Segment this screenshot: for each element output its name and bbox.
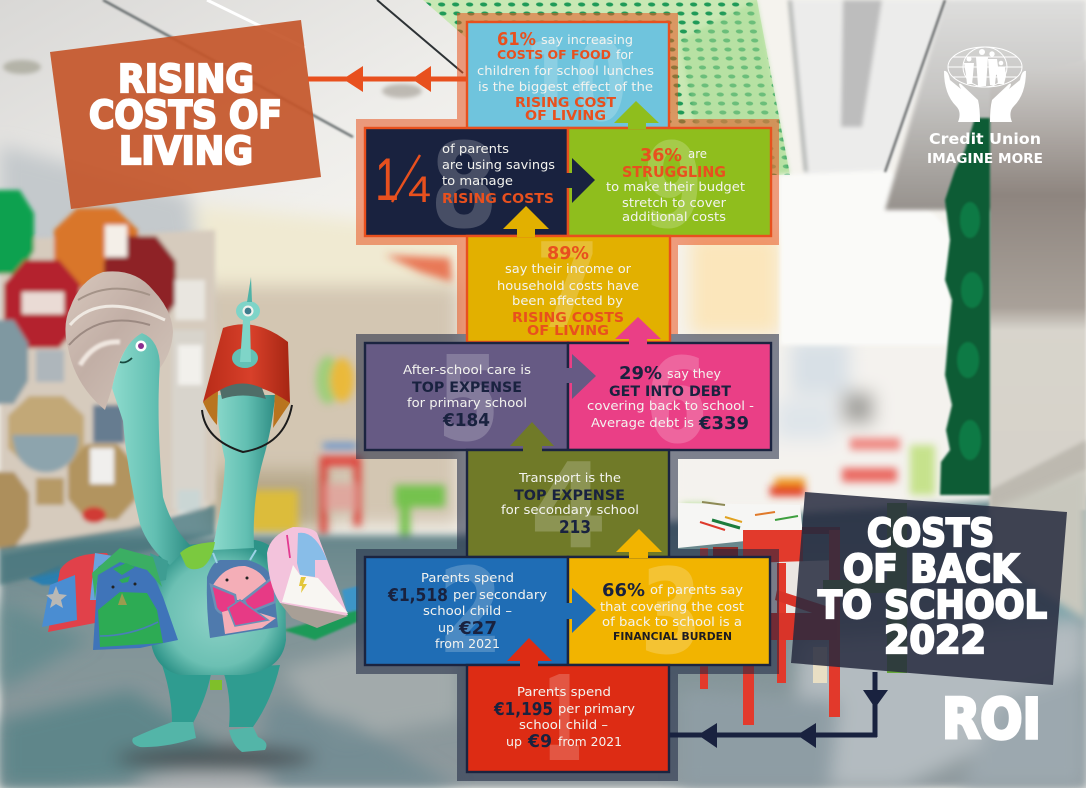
panel: step 5 after-school care: After-school care is xyxy=(403,363,531,378)
panel: step 8 savings: to manage xyxy=(442,174,513,189)
logo: Credit Union: Credit Union xyxy=(929,130,1041,148)
panel: step 8 savings: are using savings xyxy=(442,158,555,173)
logo globe xyxy=(948,47,1022,87)
panel: step 5 after-school care xyxy=(365,330,568,468)
panel: step 6 debt: GET INTO DEBT xyxy=(609,384,731,400)
panel: step 3 financial burden: 66% xyxy=(602,580,645,601)
panel: step 2 secondary spend: 2 xyxy=(438,542,503,680)
panel: step 7 income: household costs have xyxy=(497,279,639,294)
panel: step 3 financial burden: FINANCIAL BURDEN xyxy=(613,631,732,643)
panel: step 7 income: 89% xyxy=(547,243,589,264)
panel: step 9 struggling: additional costs xyxy=(622,210,726,225)
panel: step 2 secondary spend xyxy=(365,542,568,680)
panel: costs of back to school title: OF BACK xyxy=(843,547,1020,591)
panel: step 4 transport: Transport is the xyxy=(518,471,621,486)
creature feet xyxy=(132,722,266,752)
panel: step 7 income: 7 xyxy=(535,217,600,355)
arrow: step 6 to 7 xyxy=(615,317,661,345)
arrow: orange connector to rising costs title xyxy=(308,66,467,92)
logo hands xyxy=(944,71,1026,122)
panel: costs of back to school title xyxy=(791,492,1067,685)
panel: step 8 savings: of parents xyxy=(442,142,509,157)
panel: step 6 debt: covering back to school - xyxy=(587,399,754,414)
logo: Credit Union: IMAGINE MORE xyxy=(927,151,1043,167)
panel: costs of back to school title: COSTS xyxy=(867,511,994,555)
panel: step 1 primary spend: €9 xyxy=(527,731,552,752)
creature body xyxy=(150,540,286,675)
panel: step 2 secondary spend: €1,518 xyxy=(387,585,448,606)
panel: step 10 food costs: is the biggest effect of the xyxy=(478,80,653,95)
ceiling: recessed lights xyxy=(3,60,422,98)
shell turban xyxy=(65,271,173,410)
panel: step 10 food costs: for xyxy=(616,48,634,63)
floor xyxy=(0,495,1086,788)
creature legs xyxy=(162,665,280,727)
orange translucent hopscotch frame xyxy=(356,13,779,334)
panel: step 7 income: been affected by xyxy=(512,294,623,309)
panel: step 7 income: RISING COSTS xyxy=(512,310,624,326)
panel: step 6 debt xyxy=(568,332,771,470)
right neck xyxy=(212,395,275,550)
arrow: step 8 to 9 xyxy=(560,158,595,203)
panel: step 1 primary spend: Parents spend xyxy=(517,685,611,700)
green perforated ceiling panel xyxy=(423,0,790,175)
bucket hat xyxy=(202,277,292,452)
panel: step 1 primary spend: per primary xyxy=(558,702,635,717)
panel: step 4 transport: for secondary school xyxy=(501,503,639,518)
panel: step 1 primary spend xyxy=(467,650,669,788)
backpack: red with star xyxy=(42,553,113,632)
panel: step 7 income xyxy=(467,217,670,355)
panel: costs of back to school title: TO SCHOOL xyxy=(818,583,1047,627)
panel: step 2 secondary spend: from 2021 xyxy=(435,637,500,652)
panel: step 10 food costs: RISING COST xyxy=(515,95,617,111)
panel: step 6 debt: Average debt is xyxy=(591,416,694,431)
panel: step 8 savings: 4 xyxy=(408,169,431,210)
panel: rising costs of living title: COSTS OF xyxy=(89,93,282,137)
panel: step 7 income: say their income or xyxy=(505,262,632,277)
arrow: step 9 to 10 xyxy=(614,101,659,129)
backpack: butterfly xyxy=(207,550,278,638)
foreground table and red chair xyxy=(678,502,907,725)
panel: step 3 financial burden: that covering the cost xyxy=(600,600,744,615)
panel: rising costs of living title xyxy=(50,20,321,209)
panel: step 5 after-school care: TOP EXPENSE xyxy=(412,380,522,396)
backpack: pink unicorn xyxy=(267,527,348,628)
panel: step 4 transport: 4 xyxy=(530,437,607,575)
panel: step 9 struggling xyxy=(568,117,771,255)
panel: step 10 food costs: OF LIVING xyxy=(525,108,606,124)
navy translucent hopscotch frame xyxy=(356,334,779,781)
panel: step 10 food costs xyxy=(467,18,669,146)
logo: Credit Union xyxy=(927,47,1043,167)
panel: step 8 savings: 1 xyxy=(375,146,399,213)
panel: step 2 secondary spend: per secondary xyxy=(453,588,547,603)
panel: step 9 struggling: to make their budget xyxy=(606,180,745,195)
panel: step 8 savings xyxy=(365,117,568,255)
panel: step 3 financial burden: of back to school is a xyxy=(602,615,742,630)
left neck xyxy=(112,333,190,565)
panel: costs of back to school title: 2022 xyxy=(884,618,986,662)
panel: step 1 primary spend: 1 xyxy=(543,650,583,788)
arrow: navy connector from title to step 1 xyxy=(669,672,888,748)
panel: step 4 transport: TOP EXPENSE xyxy=(514,488,625,504)
arrow: step 2 to 3 xyxy=(560,588,596,633)
panel: step 5 after-school care: 5 xyxy=(437,330,500,468)
panel: step 9 struggling: STRUGGLING xyxy=(622,163,726,181)
arrow: step 7 to 8 xyxy=(503,206,549,237)
panel: step 10 food costs: say increasing xyxy=(541,33,633,48)
panel: rising costs of living title: RISING xyxy=(118,57,254,101)
panel: step 8 savings: 8 xyxy=(430,117,498,255)
arrow: step 5 to 6 xyxy=(560,354,596,399)
upper-right gray ceiling xyxy=(885,0,1086,210)
panel: step 10 food costs: children for school lunches xyxy=(477,64,654,79)
panel: step 4 transport: 213 xyxy=(559,518,591,538)
floor mats xyxy=(28,565,358,640)
backpack: green and blue dino xyxy=(92,548,178,650)
panel: step 1 primary spend: school child – xyxy=(519,718,608,733)
wall at right xyxy=(990,60,1086,510)
panel: step 10 food costs: COSTS OF FOOD xyxy=(497,48,611,62)
panel: step 2 secondary spend: €27 xyxy=(458,618,497,639)
panel: step 6 debt: 6 xyxy=(645,332,708,470)
panel: step 9 struggling: stretch to cover xyxy=(622,196,727,211)
shelves xyxy=(0,190,215,585)
panel: step 1 primary spend: up xyxy=(506,735,522,750)
panel: step 1 primary spend: from 2021 xyxy=(558,735,622,750)
hand and green goo xyxy=(150,542,215,582)
panel: step 6 debt: €339 xyxy=(698,413,749,434)
panel: step 9 struggling: are xyxy=(688,147,707,162)
panel: step 9 struggling: 9 xyxy=(643,117,703,255)
panel: step 7 income: OF LIVING xyxy=(527,323,609,339)
panel: step 1 primary spend: €1,195 xyxy=(493,699,553,720)
panel: step 3 financial burden: 3 xyxy=(640,543,702,681)
panel: step 5 after-school care: €184 xyxy=(442,411,490,431)
panel: step 2 secondary spend: up xyxy=(438,621,454,636)
panel: step 10 food costs: 10 xyxy=(523,18,627,146)
panel: step 4 transport xyxy=(467,437,669,575)
panel: step 9 struggling: 36% xyxy=(640,145,682,166)
right ceiling and vent xyxy=(780,0,950,345)
ceiling lines xyxy=(103,0,463,137)
panel: step 3 financial burden: of parents say xyxy=(650,583,743,598)
arrow: step 4 to 5 xyxy=(510,422,554,452)
arrow: step 3 to 4 xyxy=(616,529,662,558)
panel: step 3 financial burden xyxy=(568,543,770,681)
panel: step 8 savings: RISING COSTS xyxy=(442,192,554,207)
panel: step 2 secondary spend: school child – xyxy=(423,604,512,619)
character: two-necked teal creature with backpacks xyxy=(42,271,348,752)
label: ROI: ROI xyxy=(942,687,1041,751)
panel: step 6 debt: 29% xyxy=(619,363,662,384)
panel: step 2 secondary spend: Parents spend xyxy=(421,571,514,586)
logo family figures xyxy=(964,49,1006,86)
panel: rising costs of living title: LIVING xyxy=(119,129,253,173)
arrow: step 1 to 2 xyxy=(507,638,552,667)
panel: step 5 after-school care: for primary school xyxy=(407,396,527,411)
panel: step 6 debt: say they xyxy=(667,367,721,382)
panel: step 10 food costs: 61% xyxy=(497,29,536,50)
green plant wall xyxy=(940,118,990,495)
